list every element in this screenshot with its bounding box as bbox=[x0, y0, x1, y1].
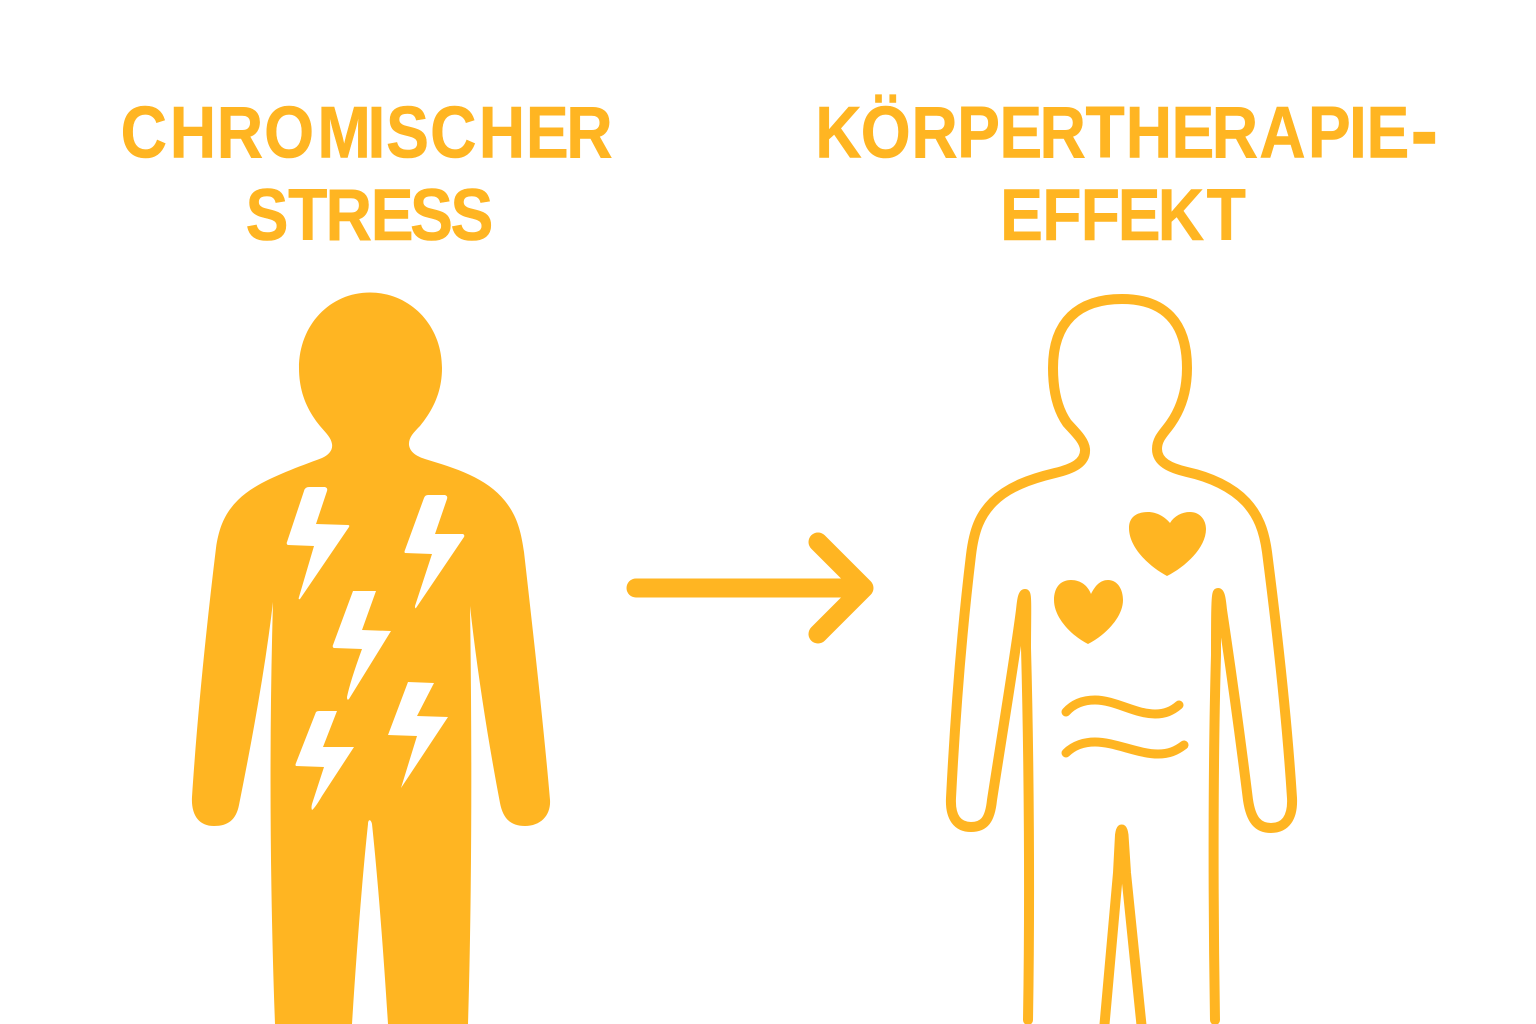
heading: chronic stress: STRESS bbox=[246, 174, 493, 256]
icon: wave bottom bbox=[1066, 742, 1184, 754]
icon: heart upper bbox=[1129, 512, 1206, 576]
icon: lightning bolt 2 bbox=[404, 495, 464, 608]
icon: heart lower bbox=[1054, 580, 1123, 644]
heading: body therapy effect bbox=[815, 77, 1438, 256]
icon: lightning bolt 5 bbox=[388, 682, 448, 788]
heading: chronic stress bbox=[121, 92, 613, 256]
heading: chronic stress: CHROMISCHER bbox=[121, 92, 613, 174]
outlined body figure bbox=[951, 299, 1292, 1024]
heading: body therapy effect: EFFEKT bbox=[1000, 174, 1246, 256]
heading: body therapy effect: KÖRPERTHERAPIE bbox=[815, 92, 1409, 174]
icon: lightning bolt 4 bbox=[296, 711, 354, 810]
icon: wave top bbox=[1066, 700, 1179, 714]
icon: lightning bolt 3 bbox=[333, 591, 391, 700]
arrow bbox=[636, 542, 864, 634]
heading: body therapy effect: - bbox=[1410, 77, 1438, 183]
icon: lightning bolt 1 bbox=[287, 487, 349, 599]
filled body figure bbox=[192, 292, 550, 1024]
